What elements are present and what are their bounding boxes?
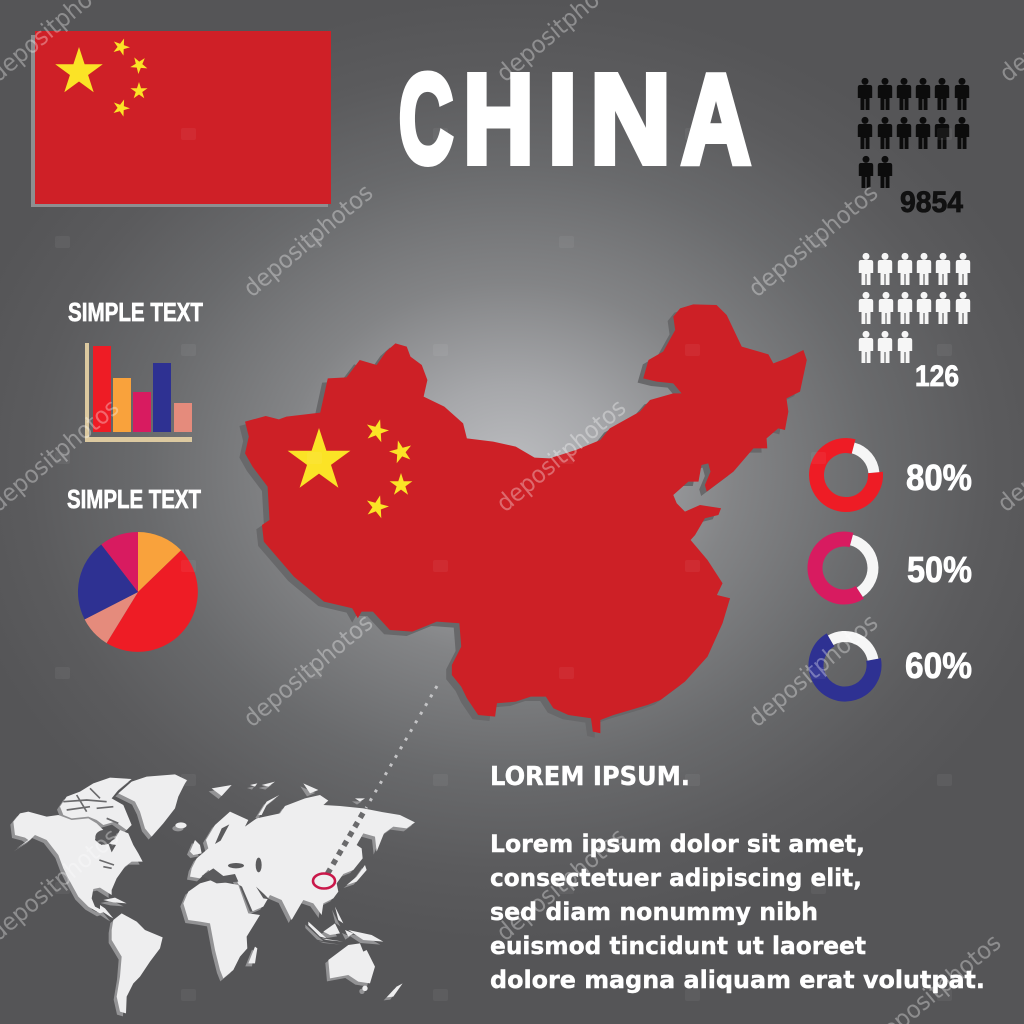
title: N	[590, 48, 671, 190]
donut 50%	[815, 539, 873, 597]
dotted connector from China to world map	[325, 686, 437, 878]
donut 60%	[816, 636, 874, 694]
heading: simple text 1: SIMPLE TEXT	[68, 297, 203, 327]
body text: dolore magna aliquam erat volutpat.	[490, 966, 985, 994]
world map	[10, 774, 415, 1016]
label 50%: 50%	[907, 549, 972, 590]
number 126: 126	[915, 360, 959, 393]
body text: sed diam nonummy nibh	[490, 898, 818, 926]
label 80%: 80%	[906, 457, 972, 498]
pie chart	[78, 532, 198, 652]
title	[399, 48, 750, 190]
bar chart	[85, 343, 192, 442]
depositphotos watermarks: depositphotos	[491, 822, 631, 947]
body text: Lorem ipsum dolor sit amet,	[490, 830, 865, 858]
title: H	[463, 48, 534, 190]
heading: lorem ipsum: LOREM IPSUM.	[490, 762, 690, 792]
heading: simple text 2: SIMPLE TEXT	[67, 484, 201, 514]
people pictogram: black	[858, 78, 969, 188]
title: A	[682, 48, 750, 190]
number 9854: 9854	[900, 186, 963, 219]
location marker	[313, 874, 335, 888]
body text: euismod tincidunt ut laoreet	[490, 932, 866, 960]
depositphotos watermarks: depositphotos	[238, 608, 378, 733]
depositphotos watermarks: depositphotos	[743, 608, 883, 733]
flag of China	[31, 31, 331, 207]
depositphotos watermarks: depositphotos	[743, 178, 883, 303]
map of China with flag stars	[239, 304, 807, 738]
watermark camera icons	[55, 128, 952, 1001]
label 60%: 60%	[905, 645, 972, 686]
body text: consectetuer adipiscing elit,	[490, 864, 862, 892]
depositphotos watermarks: depositphotos	[491, 393, 631, 518]
map stars	[288, 416, 415, 519]
donut 80%	[817, 446, 876, 505]
body text	[490, 830, 985, 994]
people pictogram: white	[859, 253, 970, 363]
title: I	[548, 48, 577, 190]
depositphotos watermarks: depositphotos	[238, 178, 378, 303]
title: C	[399, 48, 453, 190]
